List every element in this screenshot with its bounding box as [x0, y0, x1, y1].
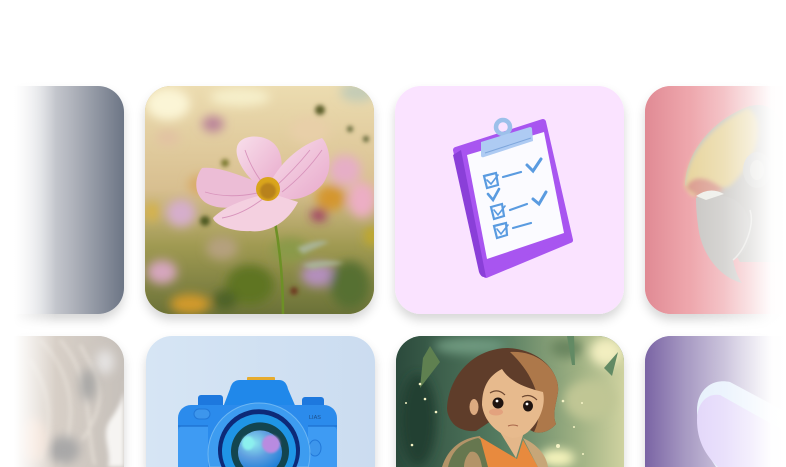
checklist items	[484, 159, 546, 238]
card: gray gradient	[0, 86, 124, 314]
flower blossom	[196, 137, 329, 231]
camera lens	[208, 403, 310, 467]
edge fade: right	[690, 60, 786, 467]
card: clipboard illustration	[395, 86, 624, 314]
girl figure	[442, 348, 558, 467]
parrot head	[683, 105, 762, 283]
card: flower photo	[144, 82, 380, 314]
card: hair photo	[21, 336, 128, 467]
3D shape	[697, 381, 762, 467]
card: camera illustration	[146, 336, 375, 467]
image card gallery	[21, 86, 766, 467]
camera label text: LIAS	[309, 415, 321, 421]
parrot beak	[696, 197, 742, 283]
edge fade: left	[0, 60, 56, 467]
card: violet 3D shape	[641, 336, 765, 467]
card: parrot photo	[645, 86, 786, 314]
flower stem	[275, 222, 283, 314]
icon: camera	[178, 377, 337, 467]
girl face	[482, 369, 544, 438]
card: anime girl illustration	[396, 336, 624, 467]
icon: clipboard	[453, 120, 570, 277]
